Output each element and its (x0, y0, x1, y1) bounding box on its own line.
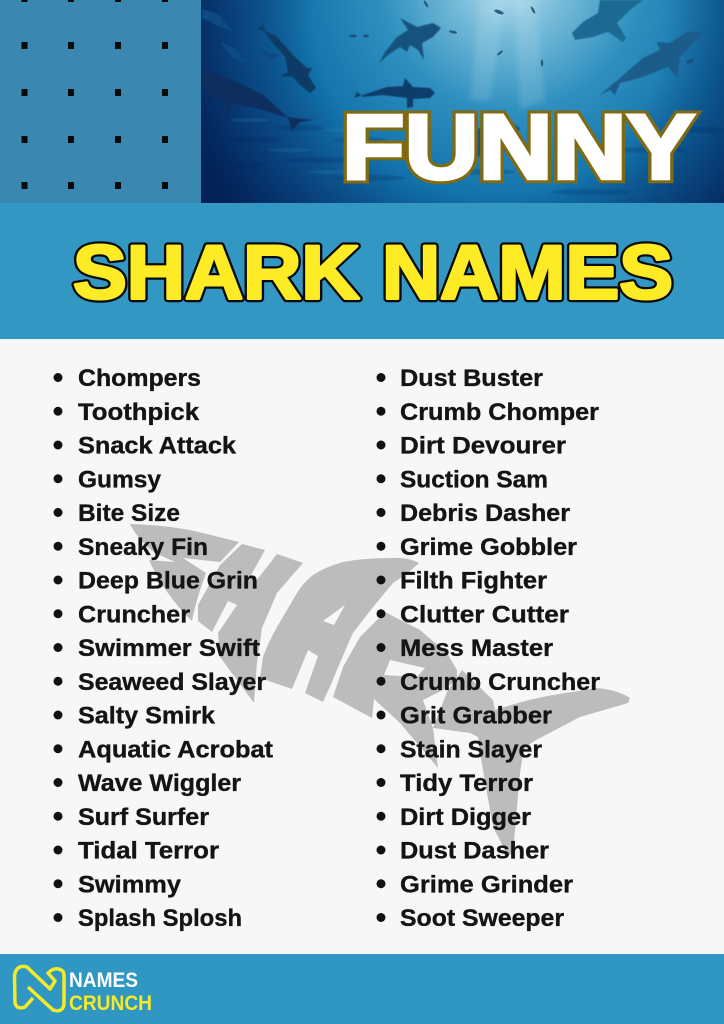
name: Swimmer Swift: Swimmer Swift (78, 635, 260, 662)
photo: sharks swimming underwater (201, 0, 724, 203)
watermark: shark made of the word SHARK (130, 524, 630, 856)
name: Splash Splosh: Splash Splosh (78, 905, 242, 932)
name: Crumb Chomper: Crumb Chomper (400, 399, 599, 426)
small fish (349, 0, 694, 67)
name: Grit Grabber: Grit Grabber (400, 702, 552, 730)
name: Snack Attack: Snack Attack (78, 432, 237, 460)
band: title background (0, 203, 724, 339)
name: Stain Slayer: Stain Slayer (400, 736, 542, 763)
name: Debris Dasher: Debris Dasher (400, 500, 570, 527)
icon: N monogram (14, 966, 64, 1011)
name: Toothpick: Toothpick (78, 399, 200, 426)
shark: middle (348, 78, 435, 108)
name: Seaweed Slayer: Seaweed Slayer (78, 669, 266, 696)
name: Dust Dasher: Dust Dasher (400, 838, 549, 864)
letter K (fin and tail) (433, 670, 630, 856)
name: Dirt Digger: Dirt Digger (400, 804, 531, 831)
name: Grime Grinder: Grime Grinder (400, 871, 573, 898)
letter R (333, 612, 457, 768)
shark silhouettes (202, 0, 702, 158)
name: Wave Wiggler: Wave Wiggler (78, 770, 241, 797)
dot grid (22, 0, 168, 189)
name: Suction Sam: Suction Sam (400, 466, 548, 493)
name: Swimmy: Swimmy (78, 871, 182, 898)
name: Bite Size: Bite Size (78, 500, 180, 527)
name list: right column (376, 365, 600, 932)
name: Mess Master: Mess Master (400, 635, 553, 662)
shark: dark lower-left (202, 68, 313, 130)
shark: faint behind title (478, 123, 520, 157)
letter H (198, 544, 303, 703)
panel: dotted square (0, 0, 201, 203)
name: Aquatic Acrobat: Aquatic Acrobat (78, 736, 273, 763)
name: Clutter Cutter: Clutter Cutter (400, 601, 569, 628)
name: Dust Buster: Dust Buster (400, 365, 543, 392)
letter A (260, 558, 419, 702)
name: Salty Smirk: Salty Smirk (78, 702, 216, 730)
name: Gumsy: Gumsy (78, 466, 162, 493)
name: Tidy Terror: Tidy Terror (400, 770, 533, 797)
logo: Names Crunch (14, 966, 152, 1015)
logo word: CRUNCH: CRUNCH (69, 992, 152, 1015)
name: Deep Blue Grin: Deep Blue Grin (78, 568, 258, 594)
name: Filth Fighter: Filth Fighter (400, 568, 547, 594)
shark: faint upper-left pair (202, 9, 280, 63)
name: Crumb Cruncher: Crumb Cruncher (400, 669, 600, 696)
name: Soot Sweeper: Soot Sweeper (400, 905, 564, 932)
name: Tidal Terror: Tidal Terror (78, 838, 219, 864)
name list: left column (54, 365, 273, 932)
letter S (tail) (130, 524, 239, 621)
shark: top right (572, 0, 643, 42)
name: Surf Surfer: Surf Surfer (78, 804, 209, 831)
shark: top centre (379, 18, 441, 63)
heading: SHARK NAMES: SHARK NAMES (73, 230, 673, 316)
logo word: NAMES: NAMES (69, 969, 138, 992)
name: Dirt Devourer: Dirt Devourer (400, 432, 566, 460)
name: Chompers: Chompers (78, 365, 201, 392)
name: Sneaky Fin: Sneaky Fin (78, 534, 208, 561)
shark: right (600, 32, 702, 95)
heading: FUNNY: FUNNY (342, 96, 695, 198)
heading: SHARK NAMES: SHARK NAMES (73, 230, 673, 316)
name: Cruncher: Cruncher (78, 601, 190, 628)
shark: long diving (258, 20, 316, 94)
name: Grime Gobbler: Grime Gobbler (400, 534, 577, 561)
footer band (0, 954, 724, 1024)
heading: FUNNY: FUNNY (342, 96, 695, 198)
